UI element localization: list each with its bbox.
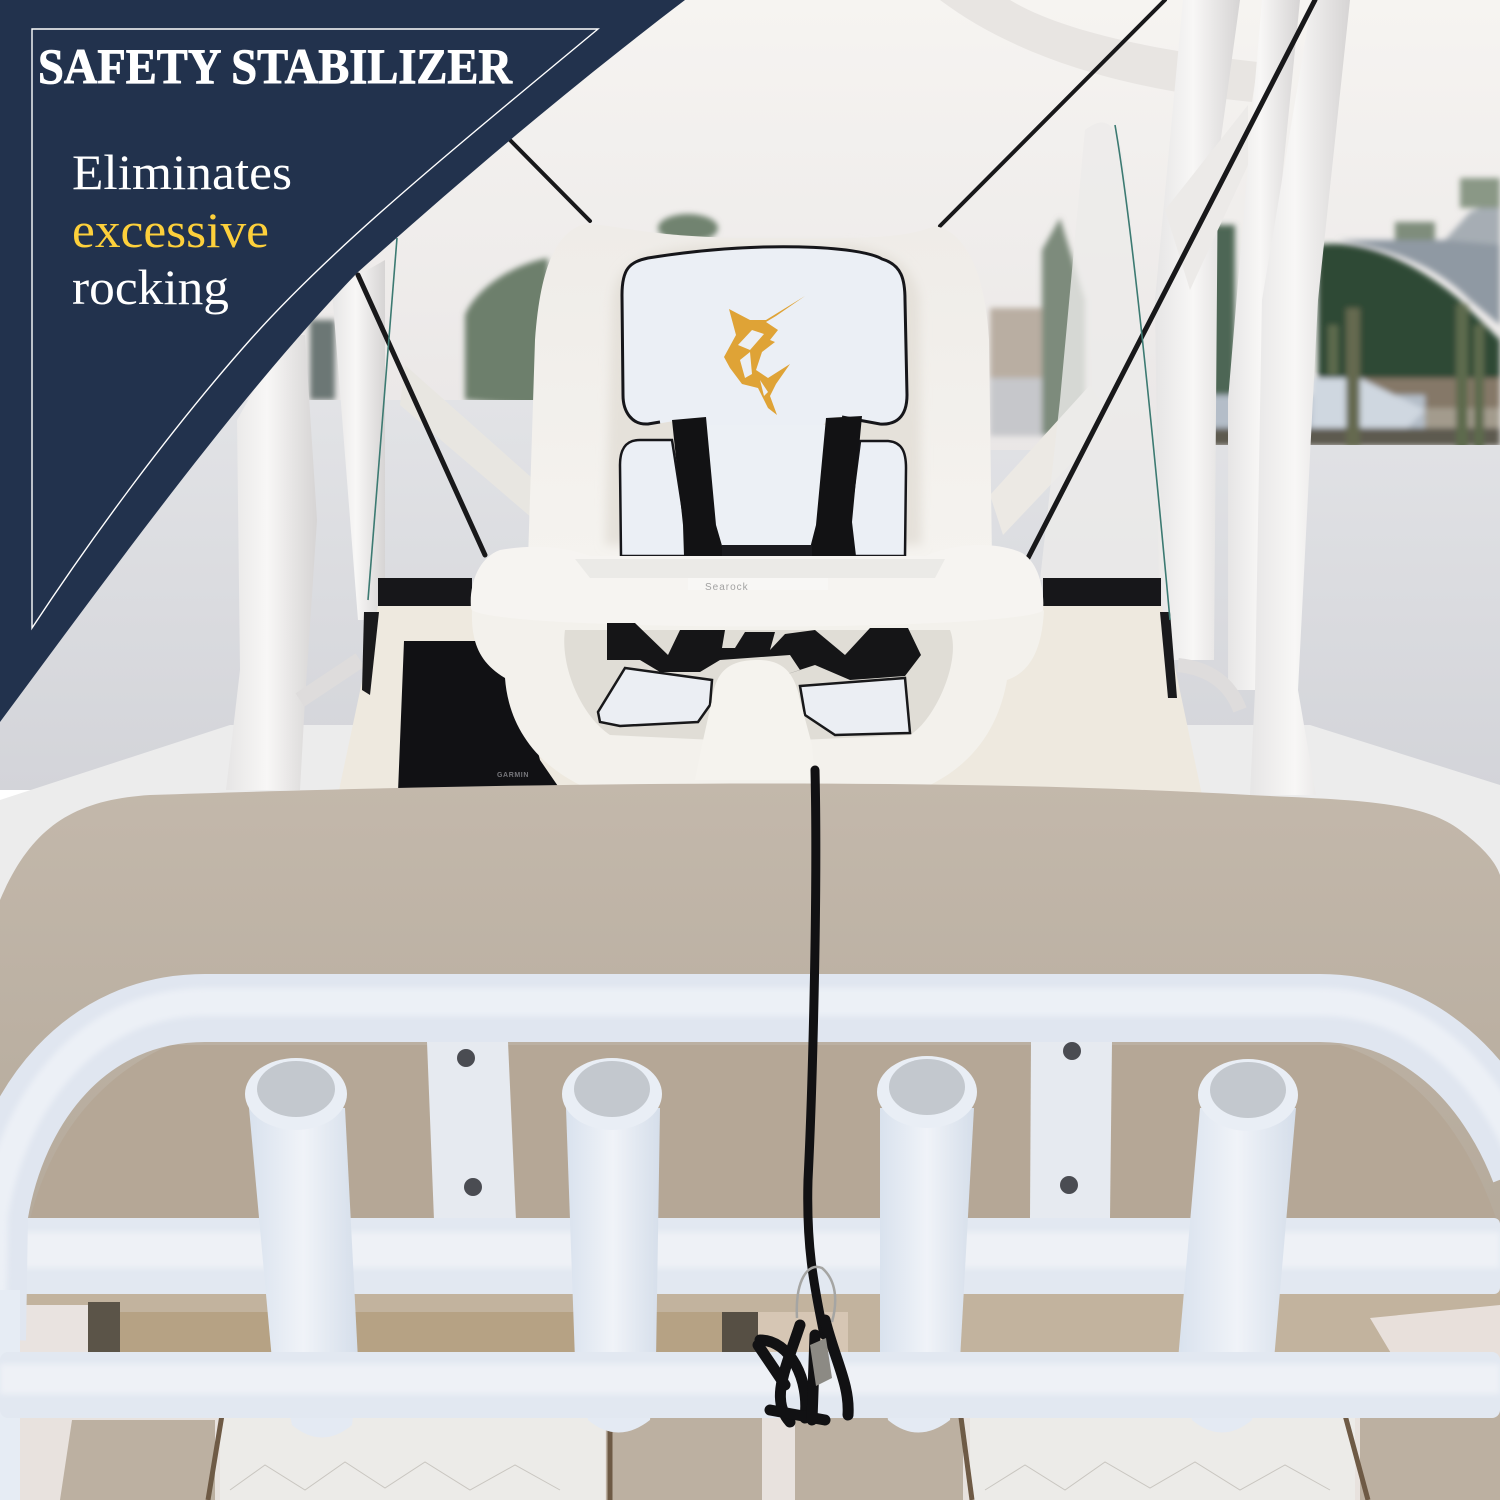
shell inner shadow — [605, 245, 922, 545]
lower right pad — [845, 441, 906, 556]
t-top arch — [940, 0, 1258, 102]
side handrail left — [300, 660, 360, 700]
rod holder 2 — [562, 1058, 662, 1432]
right strap — [808, 416, 862, 556]
console left side strip — [362, 612, 379, 695]
tray label: Searock — [705, 582, 749, 593]
rod holder 4 — [1178, 1059, 1298, 1432]
under-bench right panel — [1370, 1305, 1500, 1360]
background: sky — [0, 0, 1500, 470]
main cushion — [0, 783, 1500, 1300]
teal windshield edges — [368, 125, 1170, 620]
under-bench tan left — [120, 1312, 725, 1360]
left seat pad — [598, 668, 712, 726]
seat opening — [564, 630, 953, 740]
background: water — [0, 400, 1500, 790]
lower straps — [607, 623, 921, 680]
under-bench hinge left — [88, 1302, 120, 1360]
tray label — [688, 578, 828, 593]
chest buckle — [722, 545, 812, 557]
left vertical rail — [0, 1290, 20, 1500]
body text: Eliminates excessive rocking: rocking — [72, 259, 229, 315]
marlin logo — [724, 296, 805, 415]
bungee cord — [808, 770, 824, 1335]
garmin display: GARMIN — [497, 772, 529, 779]
seat shell back — [528, 224, 992, 560]
panel outline — [32, 29, 598, 628]
cushion panel — [28, 1045, 1498, 1240]
bottom rail — [0, 1352, 1500, 1418]
right inner pole — [1155, 0, 1240, 660]
child seat — [471, 224, 1044, 791]
console right side strip — [1160, 612, 1177, 698]
navy corner panel — [0, 0, 685, 722]
title: SAFETY STABILIZER — [38, 38, 513, 94]
rod holder 1 — [245, 1058, 358, 1438]
seat base — [472, 610, 1044, 791]
mounting bracket left — [427, 1042, 516, 1220]
windshield — [1040, 123, 1170, 580]
metal hook — [797, 1267, 835, 1322]
outer curved rail — [0, 1002, 1500, 1340]
under-bench hinge center — [722, 1312, 758, 1360]
seats bottom row — [0, 1400, 1500, 1500]
back pad piping — [622, 247, 907, 424]
console — [338, 606, 1202, 795]
pad center — [690, 425, 840, 557]
spring clamp — [810, 1338, 832, 1386]
crotch post — [695, 660, 815, 780]
back pad upper — [622, 247, 907, 556]
tray inner recess — [575, 559, 945, 578]
side handrail right — [1178, 665, 1240, 710]
left side diagonal strut — [400, 365, 532, 518]
right outer pole — [1250, 0, 1350, 795]
body text: Eliminates excessive rocking: excessive — [72, 202, 269, 258]
right seat pad — [800, 678, 910, 735]
left rear pole — [332, 260, 385, 620]
ropes — [358, 0, 1315, 558]
bungee knot — [758, 1320, 848, 1422]
garmin display — [398, 641, 562, 792]
boat deck — [0, 725, 1500, 1000]
body text: Eliminates excessive rocking — [72, 144, 292, 315]
background: far shoreline — [310, 178, 1500, 450]
right brace — [1165, 105, 1248, 290]
body text: Eliminates excessive rocking: Eliminates — [72, 144, 292, 200]
console right black pad — [1043, 578, 1161, 606]
lower bench backing — [0, 1290, 1500, 1360]
left front pole — [226, 335, 317, 790]
rod holder 3 — [877, 1056, 977, 1432]
under-bench left panel — [20, 1305, 88, 1360]
right outer pole rear — [1228, 0, 1300, 690]
right side diagonal strut — [990, 385, 1112, 535]
console left black pad — [378, 578, 472, 606]
horizontal rail middle — [0, 1218, 1500, 1294]
under-bench center — [758, 1312, 848, 1360]
mounting bracket right — [1030, 1042, 1112, 1218]
lower left pad — [620, 440, 690, 556]
left strap — [672, 417, 725, 556]
tray — [471, 545, 1043, 632]
